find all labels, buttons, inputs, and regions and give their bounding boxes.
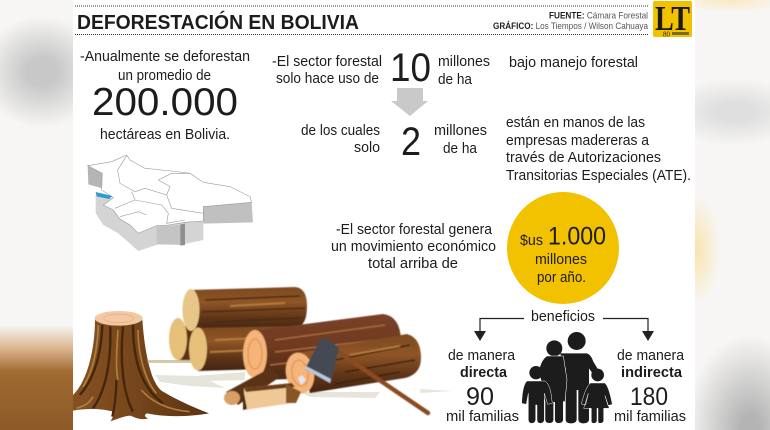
text block: forest sector use: millones xyxy=(438,53,490,70)
title: DEFORESTACIÓN EN BOLIVIA xyxy=(77,10,359,34)
text block: economic movement: total arriba de xyxy=(368,255,458,272)
arrow: down grey xyxy=(391,88,428,116)
callout: yellow circle xyxy=(507,192,619,304)
text block: two million hectares: través de Autorizaciones xyxy=(506,149,661,166)
firewood pieces xyxy=(224,368,301,410)
text block: forest sector use xyxy=(272,46,638,90)
source credit: FUENTE: Cámara Forestal xyxy=(549,10,648,22)
text block: direct benefit: mil familias xyxy=(446,408,519,425)
icon: family xyxy=(522,332,612,423)
back left log xyxy=(169,318,202,360)
mother xyxy=(539,340,567,423)
callout: yellow circle: por año. xyxy=(537,269,586,286)
text block: two million hectares: empresas madereras a xyxy=(506,132,650,149)
illustration: ground shadows xyxy=(147,360,452,398)
text block: forest sector use: -El sector forestal xyxy=(272,53,382,70)
text block: economic movement xyxy=(331,221,496,272)
text block: indirect benefit xyxy=(614,347,686,425)
big number 200.000: 200.000 xyxy=(92,81,238,124)
text block: economic movement: -El sector forestal genera xyxy=(336,221,493,238)
text block: forest sector use: bajo manejo forestal xyxy=(509,54,638,71)
big number 2: 2 xyxy=(401,120,421,164)
text block: indirect benefit: indirecta xyxy=(621,364,683,381)
big upper log xyxy=(243,314,401,380)
arrow: right benefit xyxy=(603,318,654,341)
text block: two million hectares: millones xyxy=(434,122,487,139)
logo: Los Tiempos: LT xyxy=(655,0,690,38)
blurred brown photo area on the left xyxy=(0,0,73,430)
father xyxy=(560,332,598,423)
text block: direct benefit xyxy=(446,347,519,425)
text block: indirect benefit: de manera xyxy=(617,347,685,364)
header band xyxy=(75,6,649,34)
child left xyxy=(522,366,552,423)
text block: two million hectares: de ha xyxy=(443,140,478,157)
text block: indirect benefit: 180 xyxy=(630,383,668,411)
text block: two million hectares xyxy=(301,114,691,184)
arrow: left benefit xyxy=(474,318,524,341)
text block: annual deforestation: hectáreas en Bolivia. xyxy=(100,126,230,143)
text block: two million hectares: están en manos de las xyxy=(506,114,645,131)
text block: economic movement: un movimiento económico xyxy=(331,238,496,255)
big number 10: 10 xyxy=(390,46,431,90)
illustration: tree stump xyxy=(73,311,209,421)
middle log xyxy=(189,326,305,371)
heading: beneficios: beneficios xyxy=(531,308,595,325)
text block: annual deforestation: un promedio de xyxy=(118,67,211,84)
text block: direct benefit: directa xyxy=(460,364,508,381)
text block: annual deforestation xyxy=(80,48,250,143)
graphic credit: GRÁFICO: Los Tiempos / Wilson Cahuaya xyxy=(493,21,649,32)
text block: forest sector use: de ha xyxy=(438,71,473,88)
text block: two million hectares: solo xyxy=(354,139,380,156)
text block: forest sector use: solo hace uso de xyxy=(276,70,379,87)
top log xyxy=(182,287,307,331)
callout: yellow circle: $us xyxy=(520,232,543,249)
text block: two million hectares: Transitorias Especiales (ATE). xyxy=(506,167,691,184)
axe xyxy=(298,338,428,413)
map of Bolivia xyxy=(88,155,253,251)
text block: direct benefit: 90 xyxy=(466,383,494,411)
text block: indirect benefit: mil familias xyxy=(614,408,686,425)
illustration: stacked logs xyxy=(169,287,428,413)
text block: two million hectares: de los cuales xyxy=(301,122,380,139)
callout: yellow circle: 1.000 xyxy=(548,222,606,250)
big lower log xyxy=(283,334,421,396)
logo: Los Tiempos: 80 xyxy=(663,30,670,38)
child right xyxy=(581,369,612,423)
text block: annual deforestation: -Anualmente se deforestan xyxy=(80,48,250,65)
callout: yellow circle: millones xyxy=(535,251,587,268)
text block: direct benefit: de manera xyxy=(448,347,516,364)
